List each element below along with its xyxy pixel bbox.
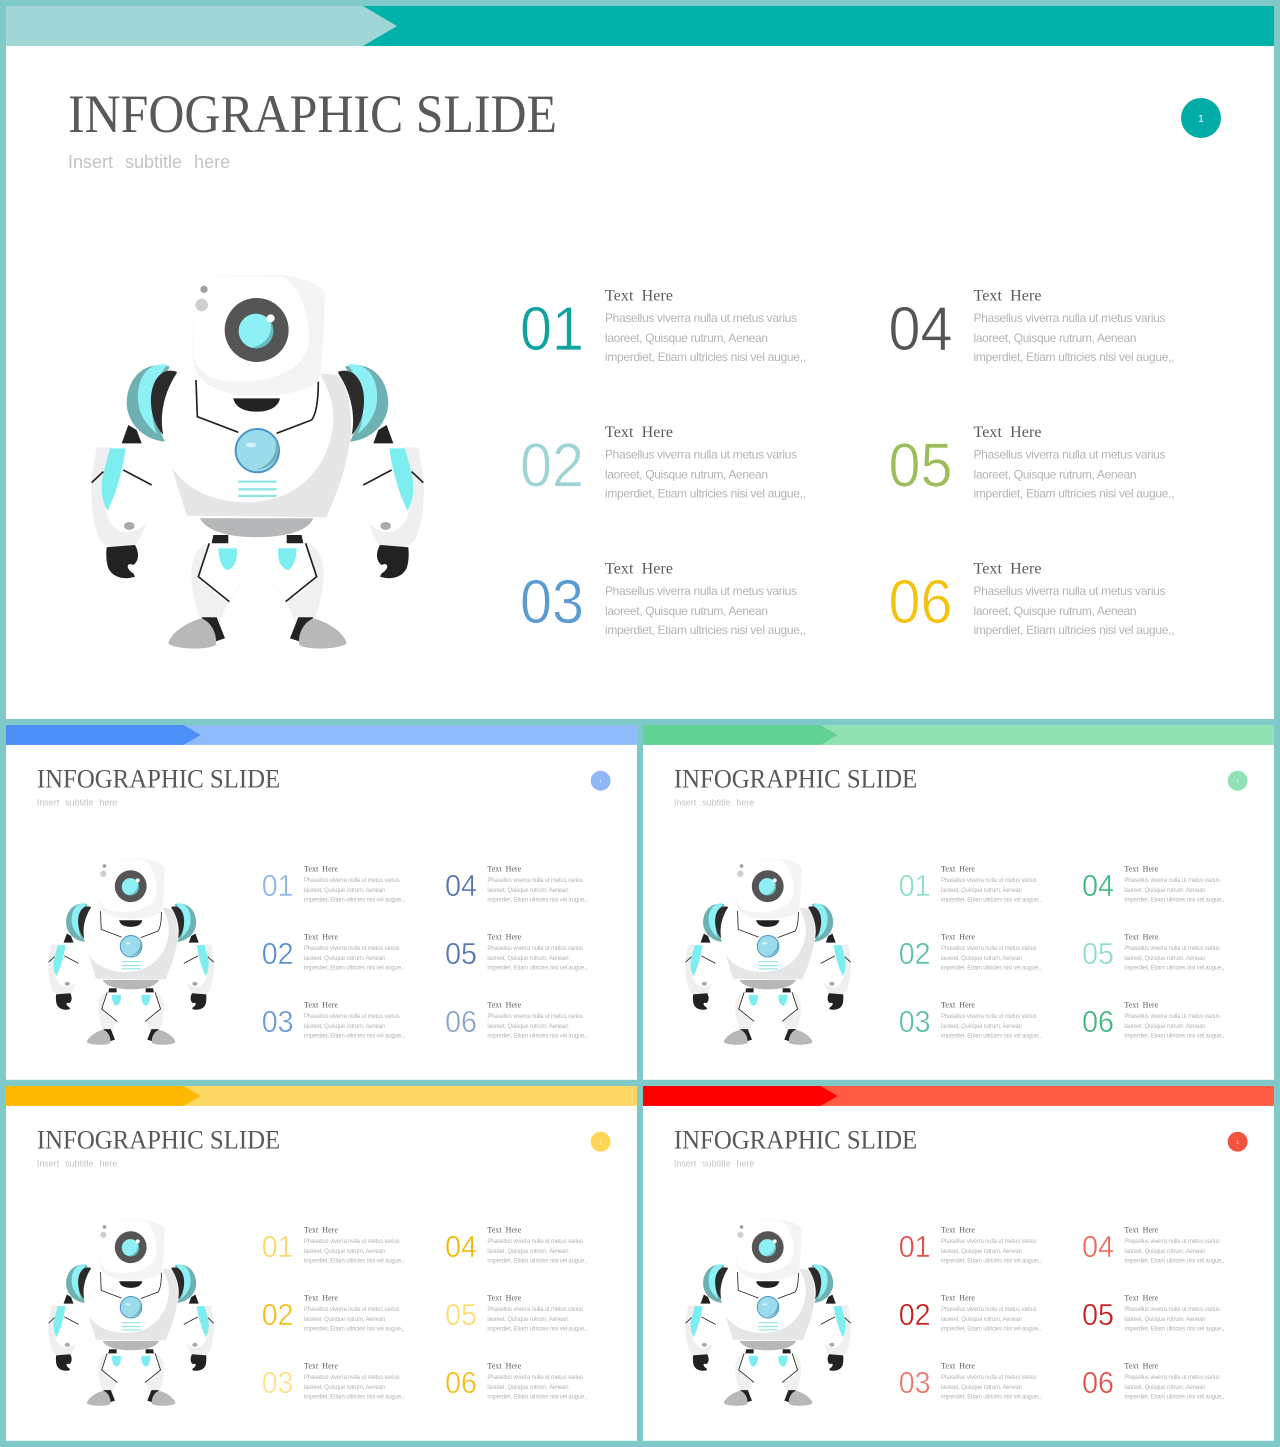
item 04: Phasellus viverra nulla ut metus varius (1124, 878, 1220, 884)
item 05 (888, 424, 1174, 500)
item 01: imperdiet, Etiam ultricies nisi vel augue,, (304, 898, 404, 904)
item 01: 01 (262, 1229, 294, 1264)
item 02 (899, 932, 1041, 972)
item 04: imperdiet, Etiam ultricies nisi vel augue,, (487, 898, 588, 904)
item 06: imperdiet, Etiam ultricies nisi vel augue,, (1124, 1394, 1225, 1400)
item 05: Text Here (1124, 932, 1159, 941)
item 05: Text Here (1124, 1293, 1159, 1302)
item 01: imperdiet, Etiam ultricies nisi vel augue,, (605, 350, 806, 364)
item 02 (262, 1293, 404, 1333)
item 04: laoreet, Quisque rutrum, Aenean (1124, 1249, 1206, 1255)
item 05 (445, 932, 588, 972)
item 01: laoreet, Quisque rutrum, Aenean (304, 1249, 385, 1255)
slide background (643, 725, 1274, 1080)
item 02: 02 (262, 936, 294, 971)
item 04 (1082, 1226, 1225, 1265)
item 01: imperdiet, Etiam ultricies nisi vel augue,, (941, 898, 1041, 904)
item 03: Phasellus viverra nulla ut metus varius (304, 1375, 400, 1381)
item 03: Text Here (304, 1361, 338, 1370)
item 04: Text Here (974, 288, 1042, 304)
item 02: Phasellus viverra nulla ut metus varius (941, 946, 1037, 952)
item 03: Phasellus viverra nulla ut metus varius (304, 1014, 400, 1020)
item 01: laoreet, Quisque rutrum, Aenean (605, 331, 768, 345)
item 03: 03 (262, 1365, 294, 1400)
item 01: laoreet, Quisque rutrum, Aenean (304, 888, 385, 894)
item 01: Text Here (941, 1226, 975, 1235)
item 03: imperdiet, Etiam ultricies nisi vel augue,, (304, 1033, 404, 1039)
item 06: laoreet, Quisque rutrum, Aenean (1124, 1385, 1206, 1391)
item 02: Text Here (941, 932, 975, 941)
item 03: imperdiet, Etiam ultricies nisi vel augue,, (605, 623, 806, 637)
item 05: Phasellus viverra nulla ut metus varius (1124, 1307, 1220, 1313)
item 03: 03 (899, 1004, 931, 1039)
item 02: Phasellus viverra nulla ut metus varius (605, 448, 797, 462)
page number badge (1228, 1132, 1248, 1152)
item 01: Text Here (605, 288, 673, 304)
item 03: laoreet, Quisque rutrum, Aenean (941, 1385, 1022, 1391)
item 04: Phasellus viverra nulla ut metus varius (1124, 1239, 1220, 1245)
item 06: Text Here (1124, 1361, 1159, 1370)
subtitle: Insert subtitle here (674, 798, 754, 808)
item 01: Phasellus viverra nulla ut metus varius (304, 1239, 400, 1245)
item 02: Text Here (941, 1293, 975, 1302)
item 04 (445, 865, 588, 904)
title: INFOGRAPHIC SLIDE (674, 764, 917, 794)
page number badge (591, 1132, 611, 1152)
item 04: Text Here (487, 1226, 522, 1235)
item 06: Phasellus viverra nulla ut metus varius (487, 1375, 583, 1381)
item 02: imperdiet, Etiam ultricies nisi vel augue,, (605, 486, 806, 500)
page number badge: 1 (599, 779, 602, 785)
item 06 (445, 1000, 588, 1039)
item 06: 06 (888, 568, 952, 637)
header bar (6, 6, 1274, 46)
item 05 (1082, 1293, 1225, 1333)
page number badge (1181, 98, 1221, 138)
item 06: laoreet, Quisque rutrum, Aenean (974, 604, 1136, 618)
item 04: 04 (888, 295, 952, 364)
item 05: 05 (445, 936, 477, 971)
item 03 (262, 1361, 404, 1400)
subtitle: Insert subtitle here (37, 798, 117, 808)
robot illustration (685, 1220, 851, 1406)
item 02 (899, 1293, 1041, 1333)
robot illustration (91, 275, 424, 649)
item 01: imperdiet, Etiam ultricies nisi vel augue,, (304, 1259, 404, 1265)
item 06: laoreet, Quisque rutrum, Aenean (487, 1385, 569, 1391)
item 02: Text Here (605, 424, 673, 441)
page number badge: 1 (599, 1140, 602, 1146)
item 05: Text Here (974, 424, 1042, 441)
item 02: Phasellus viverra nulla ut metus varius (941, 1307, 1037, 1313)
item 04 (888, 288, 1174, 364)
subtitle: Insert subtitle here (37, 1159, 117, 1169)
item 04: imperdiet, Etiam ultricies nisi vel augue,, (487, 1259, 588, 1265)
item 03: Phasellus viverra nulla ut metus varius (605, 584, 797, 598)
item 06: 06 (1082, 1004, 1114, 1039)
item 02: 02 (520, 432, 584, 500)
item 05: Phasellus viverra nulla ut metus varius (974, 448, 1166, 462)
item 03: laoreet, Quisque rutrum, Aenean (304, 1024, 385, 1030)
item 01: Phasellus viverra nulla ut metus varius (941, 878, 1037, 884)
item 03: 03 (520, 568, 584, 637)
item 06 (445, 1361, 588, 1400)
item 05: Text Here (487, 1293, 522, 1302)
page number badge: 1 (1198, 114, 1204, 125)
item 05: laoreet, Quisque rutrum, Aenean (487, 956, 569, 962)
item 04 (1082, 865, 1225, 904)
page number badge (591, 771, 611, 791)
item 03: Text Here (304, 1000, 338, 1009)
item 06 (1082, 1361, 1225, 1400)
item 06: imperdiet, Etiam ultricies nisi vel augue,, (1124, 1033, 1225, 1039)
item 05: imperdiet, Etiam ultricies nisi vel augue,, (1124, 1327, 1225, 1333)
item 06: Text Here (487, 1000, 522, 1009)
item 03: 03 (262, 1004, 294, 1039)
item 05 (445, 1293, 588, 1333)
robot illustration (48, 1220, 214, 1406)
item 04: 04 (1082, 868, 1114, 903)
header bar (6, 1086, 637, 1106)
item 05: imperdiet, Etiam ultricies nisi vel augue,, (487, 1327, 588, 1333)
slide background (6, 6, 1274, 719)
item 02: 02 (899, 936, 931, 971)
header bar (6, 725, 637, 745)
robot illustration (685, 859, 851, 1045)
item 01: 01 (262, 868, 294, 903)
subtitle: Insert subtitle here (68, 152, 230, 172)
robot illustration (48, 859, 214, 1045)
item 04: Phasellus viverra nulla ut metus varius (487, 878, 583, 884)
item 04: laoreet, Quisque rutrum, Aenean (487, 1249, 569, 1255)
item 06: Phasellus viverra nulla ut metus varius (1124, 1375, 1220, 1381)
item 06: 06 (445, 1004, 477, 1039)
item 05: Phasellus viverra nulla ut metus varius (1124, 946, 1220, 952)
item 04: laoreet, Quisque rutrum, Aenean (487, 888, 569, 894)
item 01: laoreet, Quisque rutrum, Aenean (941, 888, 1022, 894)
item 06: Text Here (1124, 1000, 1159, 1009)
item 03 (899, 1361, 1041, 1400)
item 02: imperdiet, Etiam ultricies nisi vel augue,, (941, 1327, 1041, 1333)
title: INFOGRAPHIC SLIDE (37, 764, 280, 794)
item 06: 06 (445, 1365, 477, 1400)
item 02: 02 (899, 1297, 931, 1332)
panel: yellow slide (6, 1086, 637, 1441)
item 05: Phasellus viverra nulla ut metus varius (487, 946, 583, 952)
item 02: laoreet, Quisque rutrum, Aenean (304, 956, 385, 962)
item 04: Text Here (487, 865, 522, 874)
item 03: Text Here (941, 1361, 975, 1370)
panel: red slide (643, 1086, 1274, 1441)
panel: green slide (643, 725, 1274, 1080)
item 05 (1082, 932, 1225, 972)
item 03: laoreet, Quisque rutrum, Aenean (605, 604, 768, 618)
item 04 (445, 1226, 588, 1265)
header bar (643, 1086, 1274, 1106)
item 06: Text Here (487, 1361, 522, 1370)
item 06: imperdiet, Etiam ultricies nisi vel augue,, (974, 623, 1174, 637)
item 02: Text Here (304, 1293, 338, 1302)
header bar (643, 725, 1274, 745)
item 06: Phasellus viverra nulla ut metus varius (1124, 1014, 1220, 1020)
item 01: Text Here (941, 865, 975, 874)
title: INFOGRAPHIC SLIDE (674, 1125, 917, 1155)
item 05: imperdiet, Etiam ultricies nisi vel augue,, (974, 486, 1174, 500)
item 05: 05 (1082, 1297, 1114, 1332)
item 03: Text Here (605, 560, 673, 578)
item 02: Phasellus viverra nulla ut metus varius (304, 1307, 400, 1313)
item 04: 04 (1082, 1229, 1114, 1264)
item 01: Phasellus viverra nulla ut metus varius (304, 878, 400, 884)
item 06: laoreet, Quisque rutrum, Aenean (1124, 1024, 1206, 1030)
title: INFOGRAPHIC SLIDE (37, 1125, 280, 1155)
item 05: 05 (1082, 936, 1114, 971)
item 01: 01 (899, 1229, 931, 1264)
item 05: laoreet, Quisque rutrum, Aenean (974, 468, 1136, 482)
slide background (643, 1086, 1274, 1441)
item 06: imperdiet, Etiam ultricies nisi vel augue,, (487, 1033, 588, 1039)
item 02: imperdiet, Etiam ultricies nisi vel augue,, (304, 1327, 404, 1333)
item 01 (899, 865, 1041, 904)
item 03: imperdiet, Etiam ultricies nisi vel augue,, (304, 1394, 404, 1400)
item 02: imperdiet, Etiam ultricies nisi vel augue,, (941, 966, 1041, 972)
item 03: Phasellus viverra nulla ut metus varius (941, 1014, 1037, 1020)
item 01: Text Here (304, 865, 338, 874)
item 05: Text Here (487, 932, 522, 941)
item 04: imperdiet, Etiam ultricies nisi vel augue,, (974, 350, 1174, 364)
item 04: imperdiet, Etiam ultricies nisi vel augue,, (1124, 1259, 1225, 1265)
item 01: Phasellus viverra nulla ut metus varius (941, 1239, 1037, 1245)
item 02: imperdiet, Etiam ultricies nisi vel augue,, (304, 966, 404, 972)
item 01: Phasellus viverra nulla ut metus varius (605, 311, 797, 325)
item 06 (1082, 1000, 1225, 1039)
item 01: 01 (899, 868, 931, 903)
panel: blue slide (6, 725, 637, 1080)
item 06: laoreet, Quisque rutrum, Aenean (487, 1024, 569, 1030)
item 06: imperdiet, Etiam ultricies nisi vel augue,, (487, 1394, 588, 1400)
item 04: Phasellus viverra nulla ut metus varius (974, 311, 1166, 325)
item 05: Phasellus viverra nulla ut metus varius (487, 1307, 583, 1313)
item 02 (520, 424, 806, 500)
item 04: 04 (445, 868, 477, 903)
item 05: imperdiet, Etiam ultricies nisi vel augue,, (487, 966, 588, 972)
item 03: imperdiet, Etiam ultricies nisi vel augue,, (941, 1033, 1041, 1039)
page number badge: 1 (1236, 1140, 1239, 1146)
slide background (6, 725, 637, 1080)
subtitle: Insert subtitle here (674, 1159, 754, 1169)
title: INFOGRAPHIC SLIDE (68, 84, 557, 144)
page number badge: 1 (1236, 779, 1239, 785)
item 05: 05 (888, 432, 952, 500)
item 03: laoreet, Quisque rutrum, Aenean (941, 1024, 1022, 1030)
panel: main teal slide (6, 6, 1274, 719)
item 03: Phasellus viverra nulla ut metus varius (941, 1375, 1037, 1381)
item 02: Phasellus viverra nulla ut metus varius (304, 946, 400, 952)
slide background (6, 1086, 637, 1441)
item 01: Text Here (304, 1226, 338, 1235)
item 02: laoreet, Quisque rutrum, Aenean (304, 1317, 385, 1323)
item 06: 06 (1082, 1365, 1114, 1400)
item 04: Text Here (1124, 865, 1159, 874)
item 03: laoreet, Quisque rutrum, Aenean (304, 1385, 385, 1391)
item 03 (899, 1000, 1041, 1039)
item 06: Text Here (974, 560, 1042, 578)
item 04: laoreet, Quisque rutrum, Aenean (974, 331, 1136, 345)
item 03 (520, 560, 806, 637)
item 03: Text Here (941, 1000, 975, 1009)
item 05: laoreet, Quisque rutrum, Aenean (487, 1317, 569, 1323)
item 02: laoreet, Quisque rutrum, Aenean (941, 956, 1022, 962)
item 06: Phasellus viverra nulla ut metus varius (487, 1014, 583, 1020)
item 04: Phasellus viverra nulla ut metus varius (487, 1239, 583, 1245)
item 04: Text Here (1124, 1226, 1159, 1235)
item 04: imperdiet, Etiam ultricies nisi vel augue,, (1124, 898, 1225, 904)
item 01 (262, 1226, 404, 1265)
item 01 (520, 288, 806, 364)
item 05: imperdiet, Etiam ultricies nisi vel augue,, (1124, 966, 1225, 972)
item 02: laoreet, Quisque rutrum, Aenean (605, 468, 768, 482)
item 06: Phasellus viverra nulla ut metus varius (974, 584, 1166, 598)
item 01 (262, 865, 404, 904)
item 01 (899, 1226, 1041, 1265)
item 02: 02 (262, 1297, 294, 1332)
item 02 (262, 932, 404, 972)
item 02: Text Here (304, 932, 338, 941)
item 01: laoreet, Quisque rutrum, Aenean (941, 1249, 1022, 1255)
item 04: laoreet, Quisque rutrum, Aenean (1124, 888, 1206, 894)
item 06 (888, 560, 1174, 637)
item 05: laoreet, Quisque rutrum, Aenean (1124, 956, 1206, 962)
item 02: laoreet, Quisque rutrum, Aenean (941, 1317, 1022, 1323)
item 01: imperdiet, Etiam ultricies nisi vel augue,, (941, 1259, 1041, 1265)
item 04: 04 (445, 1229, 477, 1264)
item 01: 01 (520, 295, 584, 364)
item 05: laoreet, Quisque rutrum, Aenean (1124, 1317, 1206, 1323)
item 03 (262, 1000, 404, 1039)
page number badge (1228, 771, 1248, 791)
item 03: imperdiet, Etiam ultricies nisi vel augue,, (941, 1394, 1041, 1400)
item 05: 05 (445, 1297, 477, 1332)
item 03: 03 (899, 1365, 931, 1400)
